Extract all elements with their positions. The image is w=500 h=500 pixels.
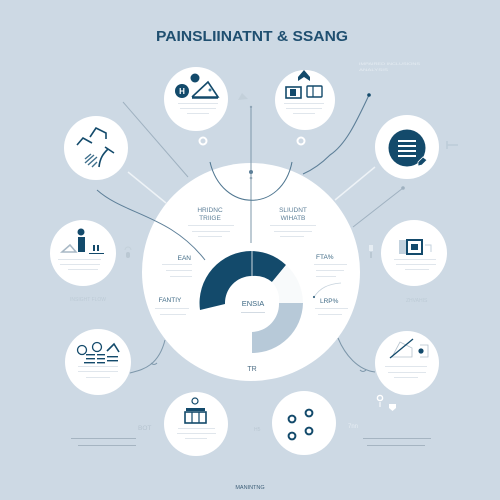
icon: square frame [399,240,431,254]
faint marker: bottom: H5 [254,427,261,433]
faint side labels [70,297,428,304]
note: top right: ANALYSIS [359,67,388,72]
icon: tools [77,128,114,167]
heading: left upper: TRIIGE [199,215,221,222]
heading: left upper: HRIDNC [197,207,223,214]
title: PAINSLIINATNT & SSANG [156,29,348,45]
node: bottom left [65,329,131,395]
faint marker: left [125,247,131,258]
label: EAN: EAN [178,255,191,262]
faint marker: top centre [238,93,248,100]
note: top right: IMPAIRED INCLUSIONS [359,61,420,66]
note: top right [359,61,420,72]
centre label: ENSIA [242,299,264,308]
icon: list badge [388,130,427,166]
footer label: MANINTNG [235,485,265,491]
icon: house and pencil [390,339,428,358]
label: LRP% [313,283,348,315]
small pins [377,395,396,411]
node: bottom 2 [272,391,336,455]
node: top left [164,67,228,131]
label: EAN [162,255,192,277]
node: right [375,115,439,179]
node: left 2 [50,220,116,286]
connector lines [97,93,405,373]
node: bottom right [375,331,439,395]
faint side labels: INSIGHT FLOW [70,297,106,303]
label: FANTIY [155,297,189,315]
icon: badge and shoe: H [179,87,185,96]
label: FTA% [314,254,347,277]
faint marker: right outer [447,141,458,149]
icon: four rings [289,410,312,439]
label: FTA%: FTA% [316,254,334,261]
faint side labels: ZHVAHIS [406,298,428,304]
caption: bottom left: BOT [138,425,151,432]
icon: building [185,398,206,423]
top node dots [200,138,304,179]
node: top right [275,70,335,130]
bottom T label: TR [247,366,257,373]
heading: left upper [188,207,234,237]
icon: gauges and lines [78,342,119,363]
icon: arrow and panels [286,70,322,98]
node: bottom [164,392,228,456]
heading: right upper [270,207,316,237]
node: right 2 [381,220,447,286]
heading: right upper: SLIUDNT [279,207,307,214]
label: FANTIY: FANTIY [159,297,182,304]
heading: right upper: WIHATB [281,215,305,222]
label: LRP%: LRP% [320,298,339,305]
node: left [64,116,128,180]
central white circle [142,163,360,381]
icon: person [62,228,104,254]
caption: bottom left [71,425,151,446]
centre label [241,299,265,313]
donut chart [200,251,303,353]
faint marker: right [369,245,373,258]
caption: bottom right: 7nn [348,424,358,430]
caption: bottom right [348,424,431,446]
